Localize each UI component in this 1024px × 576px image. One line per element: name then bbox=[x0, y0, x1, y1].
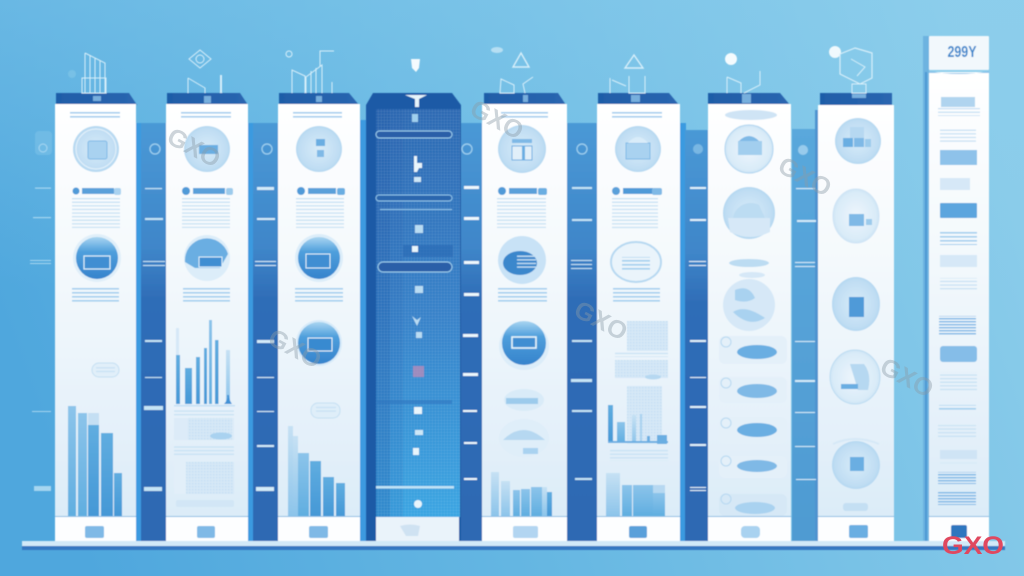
bar chart: thin bars bbox=[176, 320, 232, 404]
panel shell bbox=[366, 93, 461, 541]
column 1 header cap bbox=[56, 93, 137, 105]
watermark: GXO: GXO bbox=[162, 122, 225, 173]
column 8 bbox=[818, 93, 894, 541]
watermark: GXO: GXO bbox=[875, 352, 938, 403]
text lines bbox=[72, 198, 120, 228]
top connector bbox=[405, 95, 427, 107]
icon: pale ring bbox=[611, 242, 661, 282]
dark central panel bbox=[366, 93, 461, 541]
pale ellipses bbox=[729, 259, 769, 278]
icon: skyline bbox=[286, 51, 334, 93]
icon: panel disc bbox=[295, 234, 343, 282]
bar chart: thin bars bbox=[608, 405, 668, 444]
strip between dark panel and column 5 bbox=[461, 123, 482, 541]
heading bar bbox=[498, 187, 547, 195]
icon: device disc bbox=[296, 320, 342, 366]
column 6 bbox=[597, 93, 680, 541]
heading bar bbox=[72, 188, 121, 195]
watermark: GXO: GXO bbox=[773, 151, 836, 202]
icon: shield bbox=[411, 59, 420, 72]
pale title pill bbox=[725, 110, 777, 120]
icon: chart disc bbox=[830, 350, 880, 404]
strip between columns 2 and 3 bbox=[248, 123, 278, 541]
icon: pale disc bbox=[723, 279, 775, 331]
icon: chart disc bbox=[184, 126, 230, 172]
row items bbox=[719, 336, 787, 516]
center glyphs bbox=[412, 114, 424, 508]
column 9 body bbox=[929, 72, 989, 516]
icon: pale dome bbox=[499, 419, 549, 457]
column 1 body bbox=[55, 104, 136, 516]
icon: boxes disc bbox=[835, 118, 881, 164]
icon: window disc bbox=[832, 277, 880, 331]
heading bar bbox=[182, 187, 233, 195]
icon: device disc bbox=[499, 321, 549, 370]
strip between columns 6 and 7 bbox=[680, 123, 708, 541]
strip between columns 1 and 2 bbox=[136, 123, 166, 541]
logo: red GXO: GXO bbox=[942, 532, 1004, 560]
year card: 299Y bbox=[948, 44, 977, 61]
bar chart bbox=[606, 473, 665, 516]
bottom shelf bbox=[22, 541, 1005, 550]
stacked data panel bbox=[615, 321, 668, 444]
column 2 bbox=[166, 93, 248, 541]
pill rows bbox=[376, 131, 454, 488]
column 3 bbox=[278, 93, 366, 541]
icon: building 1 bbox=[68, 53, 106, 93]
column 9 side rail bbox=[923, 36, 929, 541]
icon: diamond and poles bbox=[188, 50, 221, 93]
year card bbox=[929, 36, 989, 70]
icon: calculator disc bbox=[615, 126, 661, 172]
pale pill bbox=[843, 503, 868, 511]
icon: cloud disc bbox=[498, 236, 546, 284]
list blocks bbox=[938, 97, 980, 505]
icon: cube and badge bbox=[829, 46, 872, 93]
data table panel bbox=[174, 405, 235, 507]
text lines bbox=[72, 286, 119, 303]
icon: book bbox=[725, 53, 760, 93]
watermark: GXO: GXO bbox=[465, 94, 528, 145]
column 7 bbox=[708, 93, 791, 541]
icon: pale curved disc bbox=[832, 439, 880, 489]
strip between columns 5 and 6 bbox=[567, 123, 597, 541]
icon: table disc bbox=[833, 189, 879, 243]
strip between columns 7 and 8 bbox=[792, 110, 818, 541]
heading bar bbox=[297, 187, 345, 195]
top decorative line icons bbox=[68, 46, 872, 93]
icon: folder disc bbox=[73, 126, 119, 172]
icon: cloud and triangle bbox=[491, 47, 533, 93]
panel inner gradient bbox=[376, 109, 460, 517]
icon: pale ellipse bbox=[504, 389, 544, 411]
bar chart bbox=[491, 472, 552, 516]
icon: panel disc bbox=[184, 235, 230, 281]
side rail with ticks, left of first column bbox=[30, 131, 52, 491]
icon: triangle and tower bbox=[610, 55, 645, 93]
heading bar bbox=[612, 187, 662, 195]
icon: panel disc bbox=[73, 234, 121, 282]
icon: pie disc bbox=[723, 187, 775, 239]
icon: window disc bbox=[725, 125, 773, 173]
callout bubble bbox=[92, 363, 119, 377]
column 9 bbox=[929, 36, 989, 541]
panel footer bbox=[376, 517, 459, 541]
column 1 bbox=[55, 93, 137, 541]
bar chart bbox=[288, 426, 345, 516]
column 5 bbox=[482, 93, 567, 541]
watermark: GXO: GXO bbox=[263, 323, 326, 374]
column-top tabs inside caps bbox=[93, 94, 866, 103]
icon: calendar disc bbox=[498, 125, 546, 173]
bar chart bbox=[68, 406, 122, 516]
column 1 title lines bbox=[70, 111, 120, 120]
watermark: GXO: GXO bbox=[569, 295, 632, 346]
icon: document disc bbox=[296, 126, 342, 172]
callout bubble bbox=[311, 403, 340, 418]
column 1 footer bbox=[55, 516, 136, 541]
